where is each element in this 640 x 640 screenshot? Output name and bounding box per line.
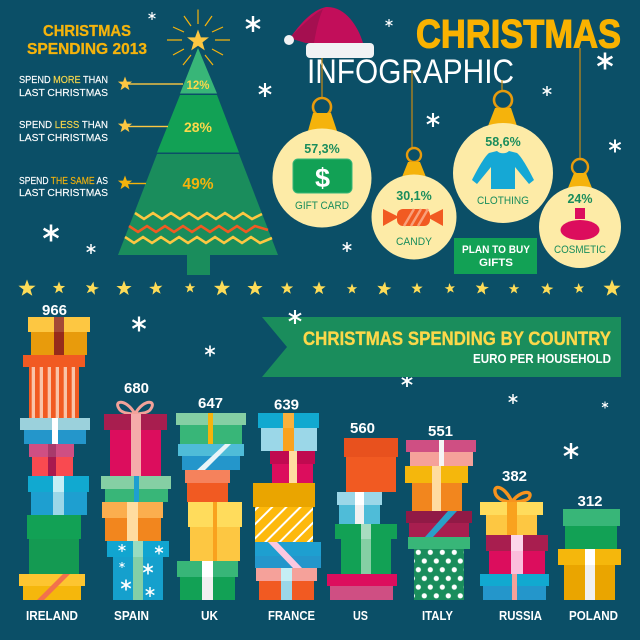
ornament: cosmetic: 24% xyxy=(567,192,593,206)
icon: santa hat xyxy=(284,7,374,58)
gift stack: Italy 551 xyxy=(405,423,476,600)
tree section: 28% xyxy=(157,95,239,152)
country labels: ITALY xyxy=(422,608,453,623)
icon: candy xyxy=(383,209,443,226)
gift stack: Poland 312: 312 xyxy=(577,493,603,510)
callout: plan to buy gifts xyxy=(454,238,537,274)
legend: spend more: SPEND MORE THAN xyxy=(19,74,108,86)
country labels xyxy=(26,608,618,623)
gift stack: Italy 551: 551 xyxy=(428,423,453,440)
title: christmas spending 2013 xyxy=(27,23,147,58)
tree percentage labels: 12% xyxy=(186,80,210,92)
tree zigzag decoration xyxy=(125,213,272,243)
legend: spend more: LAST CHRISTMAS xyxy=(19,87,108,99)
ornament: cosmetic xyxy=(539,48,621,268)
country labels: POLAND xyxy=(569,608,618,623)
ornament: gift card xyxy=(272,58,502,228)
tree percentage labels xyxy=(182,80,214,193)
legend: spend the same xyxy=(19,175,146,199)
gift stack: Spain 680: 680 xyxy=(124,380,149,397)
country labels: UK xyxy=(201,608,219,623)
gift stack: Poland 312 xyxy=(558,493,621,600)
gift stack: France 639 xyxy=(253,396,321,600)
gift stack: UK 647: 647 xyxy=(198,395,223,412)
gift stack: UK 647 xyxy=(176,395,246,600)
tree trunk xyxy=(187,255,210,275)
panel: christmas tree xyxy=(118,10,278,275)
country labels: IRELAND xyxy=(26,608,78,623)
banner: christmas spending by country xyxy=(262,310,621,377)
heading: infographic: INFOGRAPHIC xyxy=(307,53,514,91)
legend: spend less: LAST CHRISTMAS xyxy=(19,132,108,144)
ornament: clothing: 58,6% xyxy=(485,135,521,149)
tree percentage labels: 49% xyxy=(182,176,214,193)
legend: spend the same: LAST CHRISTMAS xyxy=(19,187,108,199)
ornament: candy xyxy=(372,70,456,260)
ornament: candy: CANDY xyxy=(396,236,433,248)
ornament: gift card: GIFT CARD xyxy=(295,200,349,212)
tree section: 49% xyxy=(118,154,278,255)
gift stack: Russia 382: 382 xyxy=(502,468,527,485)
legend: spend more xyxy=(19,74,183,99)
banner: christmas spending by country: CHRISTMAS SPENDING BY COUNTRY xyxy=(303,329,611,350)
gift stack: Russia 382 xyxy=(480,468,549,600)
icon: dollar note: $ xyxy=(315,163,330,193)
ornament: clothing: CLOTHING xyxy=(477,195,529,207)
tree section: 12% xyxy=(180,48,217,94)
legend: spend the same: SPEND THE SAME AS xyxy=(19,175,108,187)
ornament: gift card: 57,3% xyxy=(304,142,340,156)
banner: christmas spending by country: EURO PER HOUSEHOLD xyxy=(473,352,611,366)
legend: spend less xyxy=(19,118,168,144)
country labels: FRANCE xyxy=(268,608,315,623)
snowflakes xyxy=(44,12,621,459)
gift stack: US 560: 560 xyxy=(350,420,375,437)
gift stack: US 560 xyxy=(327,420,398,600)
ornament: cosmetic: COSMETIC xyxy=(554,244,606,256)
legend: spend less: SPEND LESS THAN xyxy=(19,119,108,131)
title: christmas spending 2013: SPENDING 2013 xyxy=(27,41,147,58)
callout: plan to buy gifts: GIFTS xyxy=(479,257,513,269)
title: christmas spending 2013: CHRISTMAS xyxy=(43,23,131,40)
callout: plan to buy gifts: PLAN TO BUY xyxy=(462,244,531,256)
icon: sweater xyxy=(472,151,534,189)
gift stack: France 639: 639 xyxy=(274,396,299,414)
gift stack: Ireland 966 xyxy=(19,302,90,600)
country labels: SPAIN xyxy=(114,608,149,623)
country labels: US xyxy=(353,608,368,623)
ornament: candy: 30,1% xyxy=(396,189,432,203)
tree percentage labels: 28% xyxy=(184,119,213,135)
gift stack: Ireland 966: 966 xyxy=(42,302,67,319)
icon: perfume bottle xyxy=(560,208,600,240)
ornament: clothing xyxy=(453,91,553,223)
country labels: RUSSIA xyxy=(499,608,543,623)
star divider row xyxy=(18,280,621,296)
gift stack: Spain 680 xyxy=(101,380,171,600)
tree star with rays xyxy=(167,10,230,65)
icon: dollar note xyxy=(293,159,352,193)
